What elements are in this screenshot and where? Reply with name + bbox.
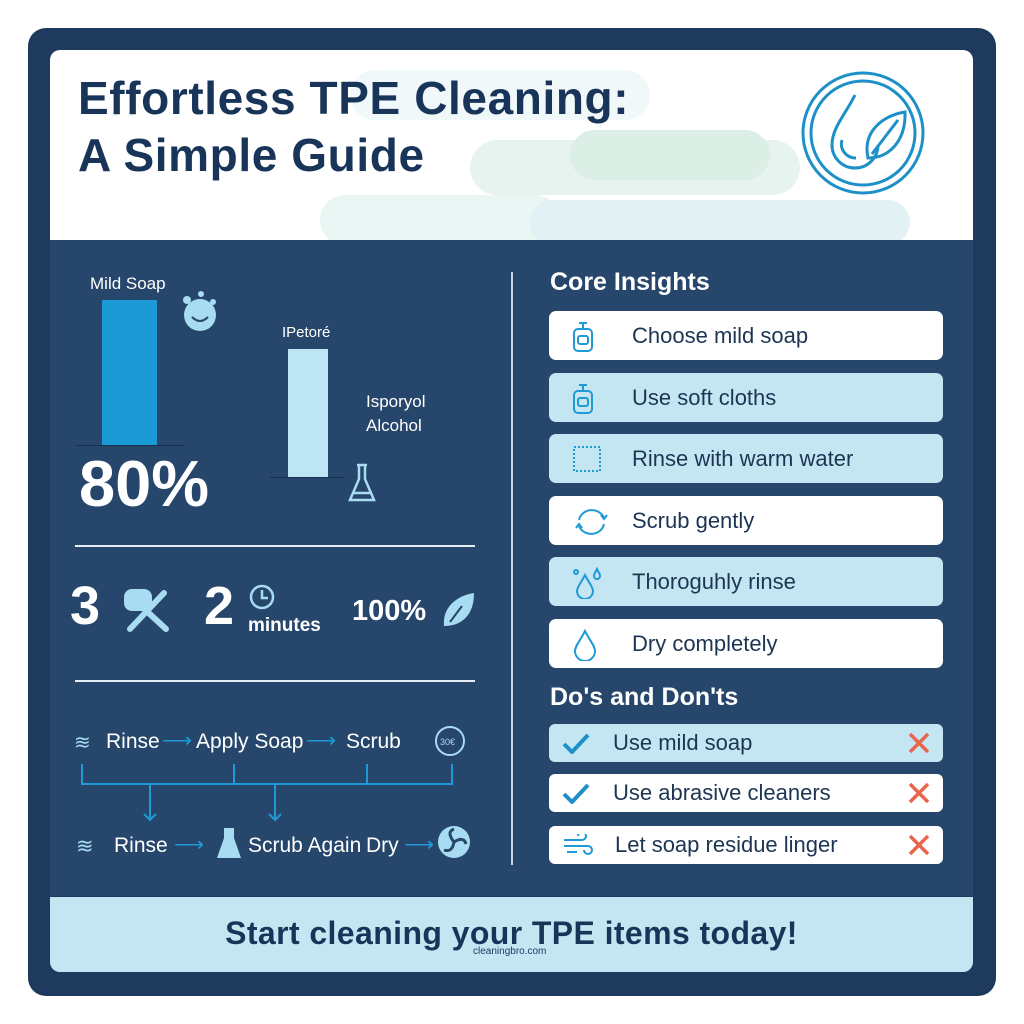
card 2 [549, 373, 943, 422]
process flow: Dry [366, 834, 399, 857]
divider [511, 272, 513, 865]
chart: bars: Mild Soap [90, 274, 166, 293]
chart: bars: 80% [79, 447, 209, 520]
footer banner [50, 897, 973, 972]
stats row: 100% [352, 595, 426, 627]
card 3 [549, 434, 943, 483]
icon: flask [348, 464, 376, 502]
process flow: ⟶ [162, 729, 192, 752]
process flow [74, 726, 470, 858]
heading: dos and donts: Do's and Don'ts [550, 683, 738, 711]
card 3: Rinse with warm water [632, 446, 853, 471]
insight list [549, 311, 943, 668]
card 5 [549, 557, 943, 606]
chart: bars: Isporyol [366, 392, 426, 411]
do 3 [549, 826, 943, 864]
process flow: ≋ [74, 732, 91, 754]
dos list [549, 724, 943, 864]
chart: bars [75, 274, 426, 520]
card 6 [549, 619, 943, 668]
process flow: Rinse [114, 834, 168, 857]
process flow: Apply Soap [196, 730, 303, 753]
card 2: Use soft cloths [632, 385, 776, 410]
card 5: Thoroguhly rinse [632, 569, 796, 594]
process flow: Scrub [346, 730, 401, 753]
stats row: 2 [204, 576, 234, 636]
card 4 [549, 496, 943, 545]
card 4: Scrub gently [632, 508, 754, 533]
stats row: 3 [70, 576, 100, 636]
footer banner: cleaningbro.com [473, 946, 546, 957]
do 1 [549, 724, 943, 762]
icon: water drop with leaf [802, 72, 924, 194]
process flow: ⟶ [306, 729, 336, 752]
header panel [50, 50, 973, 241]
heading: core insights: Core Insights [550, 268, 710, 296]
card 6: Dry completely [632, 631, 777, 656]
chart: bars: Alcohol [366, 416, 422, 435]
main dark panel [50, 240, 973, 896]
process flow: Scrub Again [248, 834, 361, 857]
do 2: Use abrasive cleaners [613, 780, 831, 805]
process flow: ⟶ [404, 833, 434, 856]
process flow: Rinse [106, 730, 160, 753]
process flow: ⟶ [174, 833, 204, 856]
do 3: Let soap residue linger [615, 832, 838, 857]
footer banner: Start cleaning your TPE items today! [225, 915, 798, 951]
do 1: Use mild soap [613, 730, 752, 755]
process flow: 30€ [440, 737, 455, 747]
title: A Simple Guide [78, 129, 425, 181]
chart: bars: IPetoré [282, 324, 330, 341]
stats row: minutes [248, 615, 321, 636]
stats row [70, 576, 474, 636]
do 2 [549, 774, 943, 812]
process flow: ≋ [76, 835, 94, 858]
icon: soap bubble [183, 291, 216, 331]
title [78, 72, 629, 181]
card 1 [549, 311, 943, 360]
card 1: Choose mild soap [632, 323, 808, 348]
title: Effortless TPE Cleaning: [78, 72, 629, 124]
